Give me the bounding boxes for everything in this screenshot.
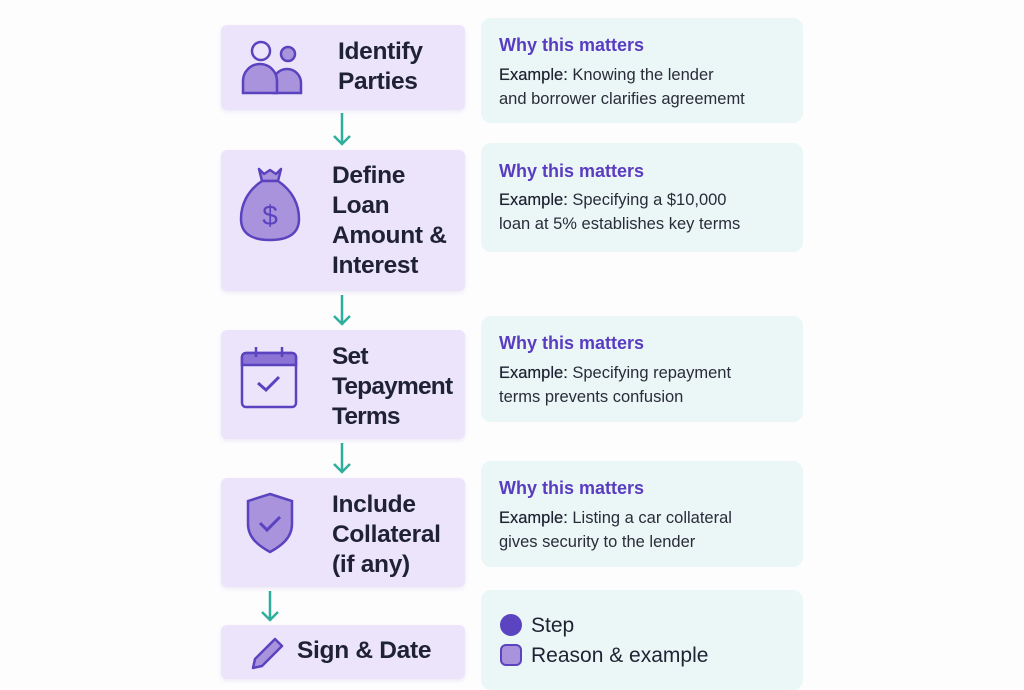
step 4: collateral	[221, 478, 465, 587]
callout 4: gives security to the lender	[499, 533, 695, 551]
title: Set	[332, 343, 368, 370]
title: Tepayment	[332, 373, 452, 400]
icon: calendar	[240, 347, 298, 408]
title: Include	[332, 491, 416, 518]
title: Parties	[338, 68, 418, 95]
arrow 3	[333, 443, 351, 474]
step 5: sign & date	[221, 625, 465, 679]
title: (if any)	[332, 551, 410, 578]
title: Interest	[332, 252, 418, 279]
title	[332, 491, 441, 578]
callout 1	[481, 18, 803, 123]
callout 4	[481, 461, 803, 567]
callout 3: Example: Specifying repayment	[499, 364, 731, 382]
title: Collateral	[332, 521, 441, 548]
title	[338, 38, 423, 95]
title: Define	[332, 162, 405, 189]
arrow 1	[333, 113, 351, 146]
title: Loan	[332, 192, 389, 219]
icon: pencil	[252, 638, 284, 670]
callout 1: Why this matters	[499, 35, 644, 55]
callout 4: Example: Listing a car collateral	[499, 509, 732, 527]
arrow 2	[333, 295, 351, 326]
callout 3: Why this matters	[499, 333, 644, 353]
legend	[481, 590, 803, 690]
arrow 4	[261, 591, 279, 622]
step 3: repayment	[221, 330, 465, 439]
callout 2: Why this matters	[499, 161, 644, 181]
icon: shield	[246, 492, 294, 554]
step 1: identify parties	[221, 25, 465, 110]
callout 1: and borrower clarifies agreememt	[499, 90, 745, 108]
title: Sign & Date	[297, 637, 431, 664]
callout 2: Example: Specifying a $10,000	[499, 191, 726, 209]
callout 2: loan at 5% establishes key terms	[499, 215, 740, 233]
title	[332, 343, 453, 430]
callout 3: terms prevents confusion	[499, 388, 683, 406]
icon: money bag: $	[262, 200, 278, 231]
legend: step: Step	[531, 614, 574, 637]
callout 2	[481, 143, 803, 252]
icon: money bag	[240, 168, 300, 242]
title	[332, 162, 447, 279]
title: Identify	[338, 38, 423, 65]
title: Terms	[332, 403, 400, 430]
callout 1: Example: Knowing the lender	[499, 66, 714, 84]
icon: people	[242, 40, 302, 94]
title: Amount &	[332, 222, 447, 249]
callout 4: Why this matters	[499, 478, 644, 498]
legend: reason: Reason & example	[531, 644, 708, 667]
callout 3	[481, 316, 803, 422]
step 2: define loan	[221, 150, 465, 291]
legend: step	[500, 614, 574, 637]
